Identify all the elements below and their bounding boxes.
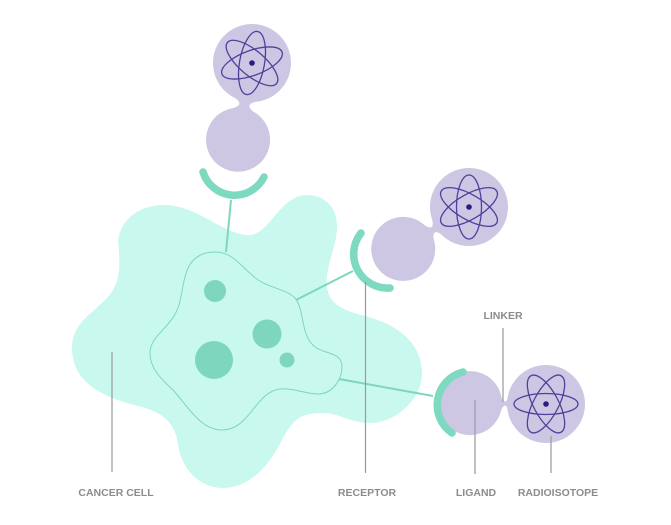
- label: ligand: LIGAND: [456, 487, 497, 499]
- leader lines: [112, 282, 551, 474]
- nucleus outline: [150, 252, 342, 430]
- icon: atom: [514, 370, 578, 438]
- molecule: right: [437, 364, 585, 443]
- organelles: [195, 280, 294, 379]
- label: radioisotope: RADIOISOTOPE: [518, 487, 598, 499]
- label: cancer cell: CANCER CELL: [78, 487, 154, 499]
- linker and ligand body: [194, 18, 297, 178]
- receptor arc: [354, 233, 390, 288]
- receptor arc: [437, 372, 463, 433]
- linker and ligand body: [355, 153, 523, 299]
- icon: atom: [435, 175, 503, 239]
- receptor arc: [203, 172, 264, 195]
- icon: atom: [218, 29, 286, 97]
- molecule: middle: [354, 153, 523, 299]
- cell body: [72, 195, 422, 488]
- label: linker: LINKER: [483, 310, 523, 322]
- receptor stems: [226, 200, 433, 396]
- label: receptor: RECEPTOR: [338, 487, 396, 499]
- cancer cell: [72, 195, 422, 488]
- molecule: top: [194, 18, 297, 195]
- linker and ligand body: [438, 364, 585, 443]
